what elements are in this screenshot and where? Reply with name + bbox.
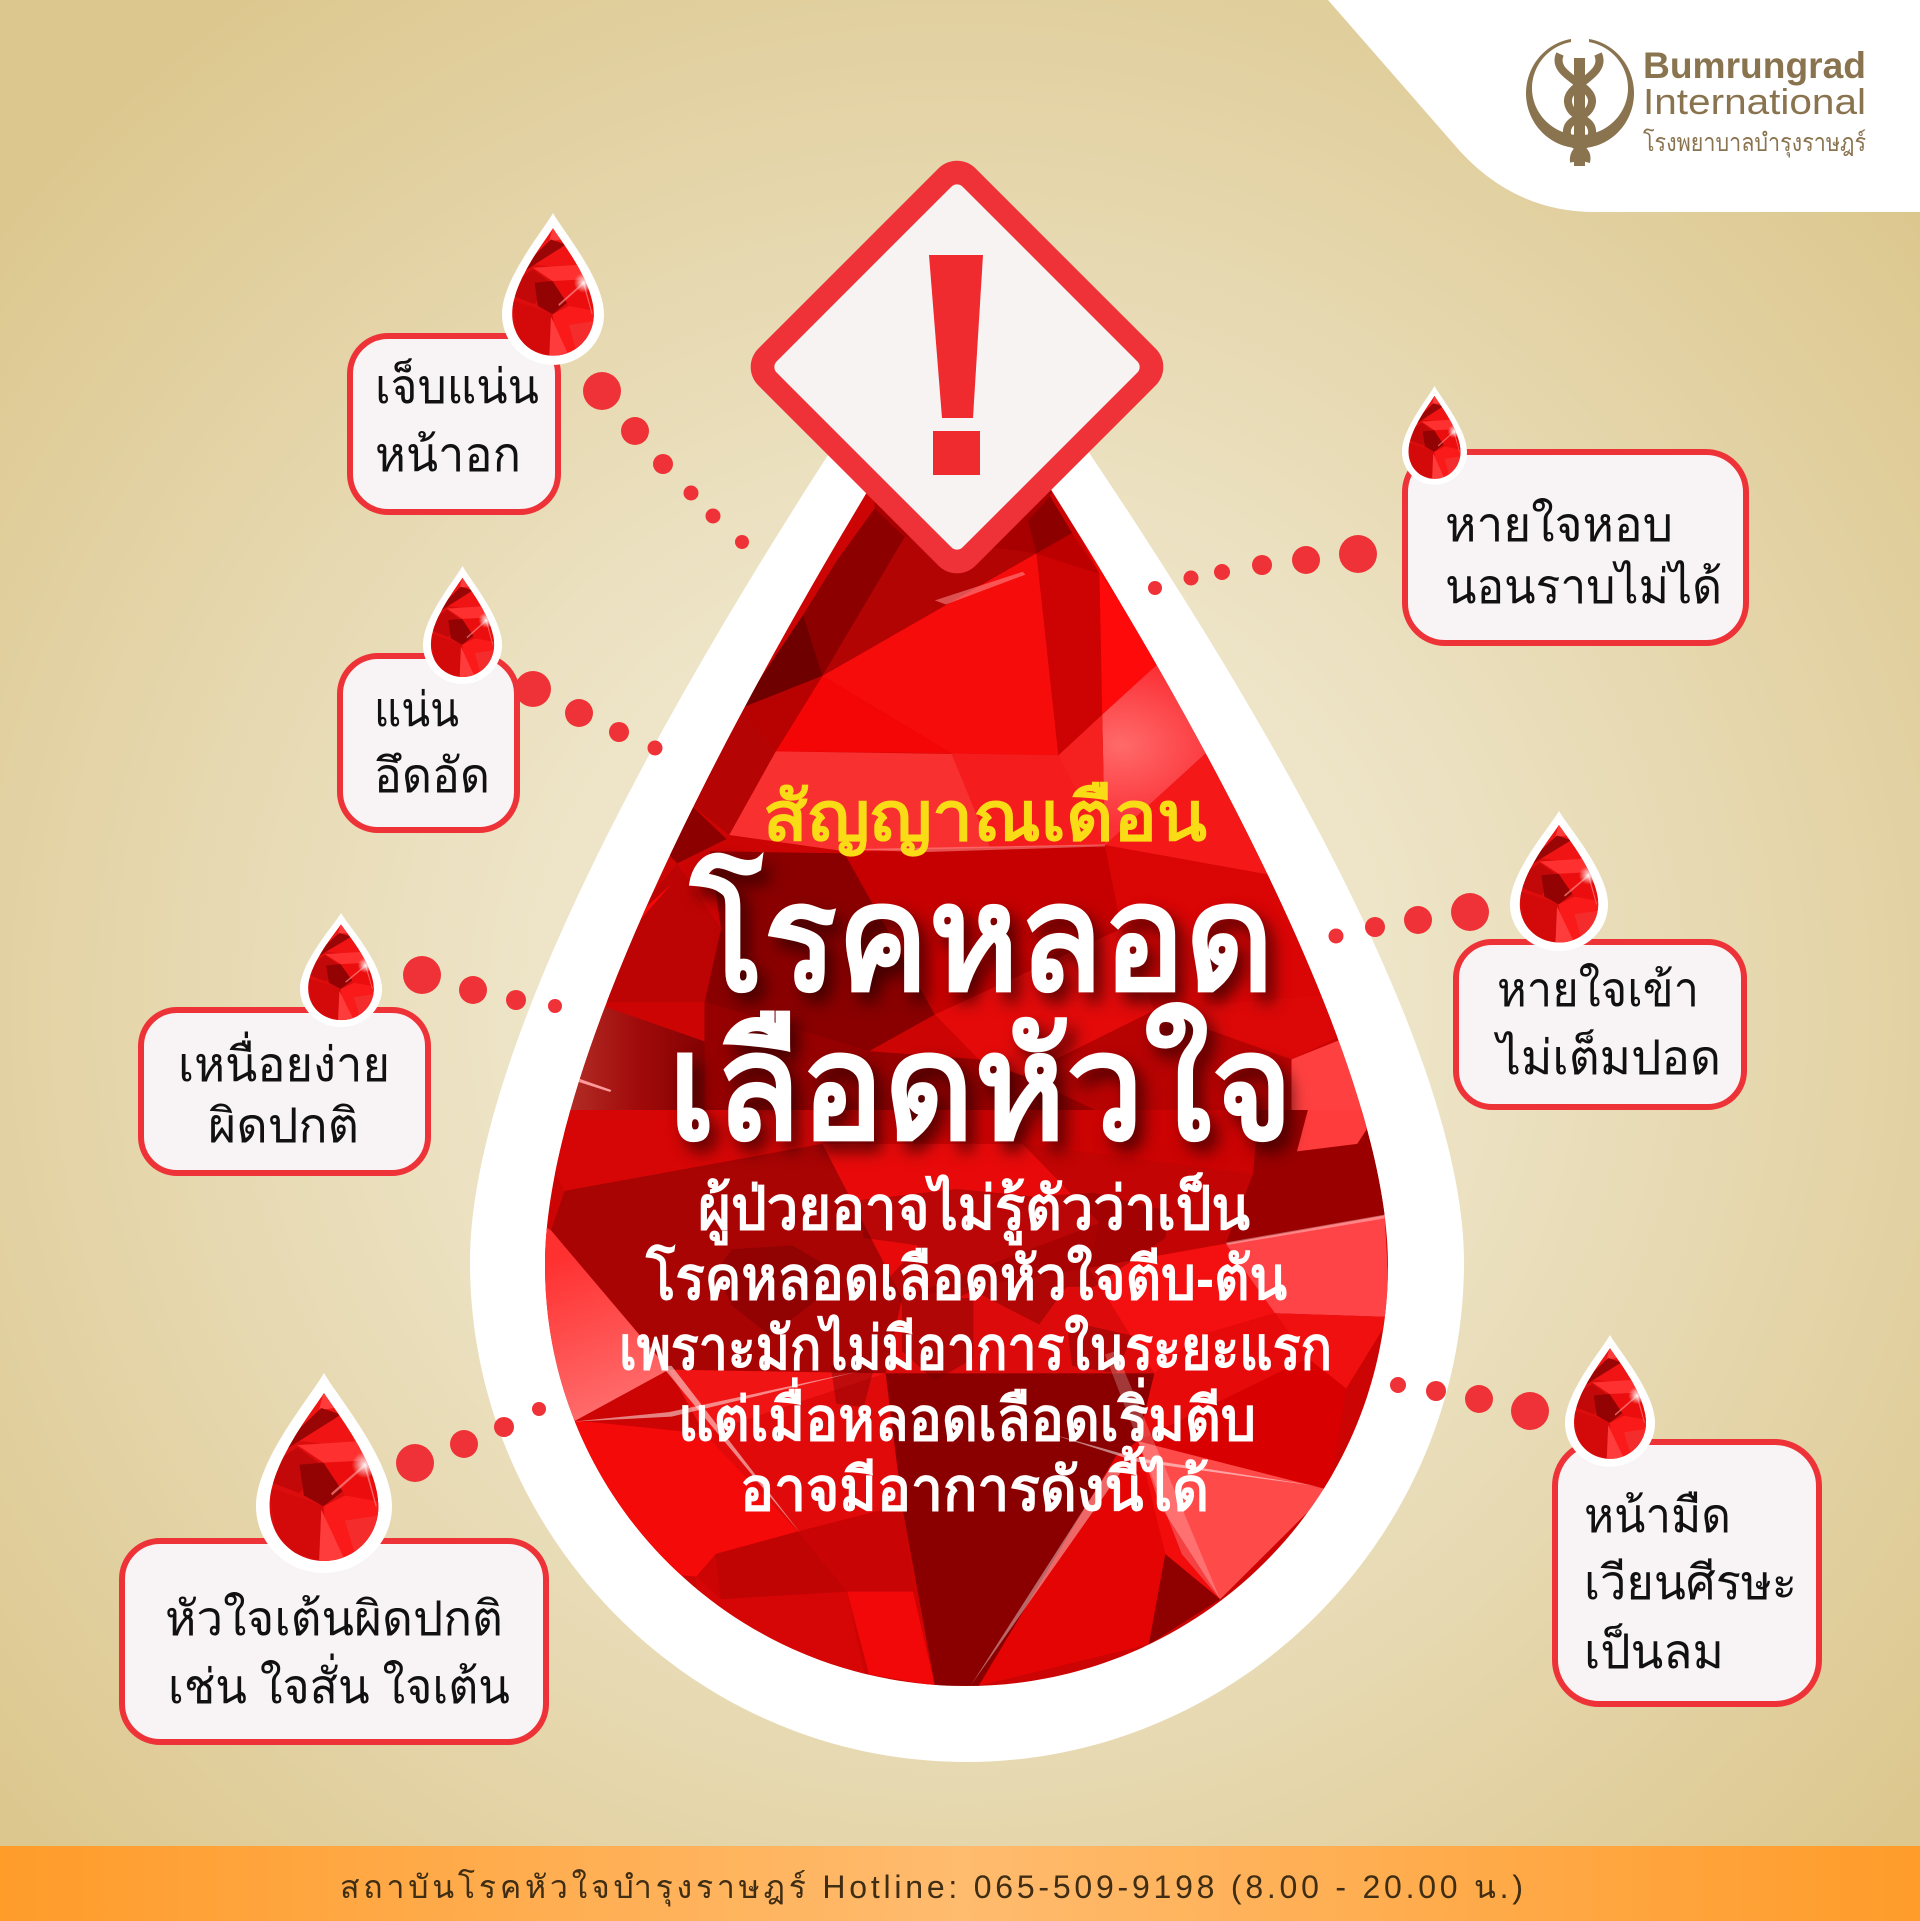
icon: ruby drop <box>502 213 604 365</box>
icon: ruby drop <box>300 913 382 1027</box>
white logo corner panel <box>1328 0 1920 212</box>
body text: โรคหลอดเลือดหัวใจตีบ-ตัน <box>645 1243 1287 1312</box>
dotted connector: fatigue <box>403 956 562 1013</box>
body text: เพราะมักไม่มีอาการในระยะแรก <box>619 1313 1332 1382</box>
light rays <box>573 1215 1385 1686</box>
chest pain text: หน้าอก <box>375 429 521 482</box>
shortness of breath text: นอนราบไม่ได้ <box>1445 559 1722 614</box>
dotted connector: dizziness <box>1390 1377 1549 1430</box>
icon: ruby drop <box>256 1373 392 1573</box>
logo thai name: โรงพยาบาลบำรุงราษฎร์ <box>1643 128 1866 158</box>
icon: ruby drop <box>423 566 502 684</box>
world map silhouette <box>716 1189 1171 1407</box>
dotted connector: breathing in <box>1328 893 1489 944</box>
body text <box>619 1172 1332 1523</box>
callout: arrhythmia <box>122 1373 546 1742</box>
arrhythmia text: หัวใจเต้นผิดปกติ <box>165 1591 503 1646</box>
breathing text: ไม่เต็มปอด <box>1493 1029 1721 1085</box>
diamond frame <box>740 150 1174 584</box>
breathing text <box>1493 962 1721 1085</box>
callout: unusual fatigue <box>141 913 428 1173</box>
logo emblem: caduceus <box>1526 39 1634 166</box>
chest pain text: เจ็บแน่น <box>375 358 539 414</box>
dotted connector: chest pain <box>583 372 749 549</box>
fatigue text: เหนื่อยง่าย <box>178 1031 390 1092</box>
warning diamond with exclamation mark <box>740 150 1174 584</box>
title: coronary artery disease: โรคหลอด <box>688 851 1274 1022</box>
body text: ผู้ป่วยอาจไม่รู้ตัวว่าเป็น <box>698 1172 1250 1246</box>
tightness text <box>374 684 490 803</box>
arrhythmia text <box>165 1591 510 1714</box>
icon: ruby drop <box>1402 386 1467 485</box>
exclamation bar <box>929 255 983 418</box>
tightness text: อึดอัด <box>374 750 490 803</box>
tightness text: แน่น <box>374 684 459 737</box>
icon: ruby drop <box>1510 811 1608 951</box>
fatigue text <box>178 1031 390 1153</box>
logo wordmark: Bumrungrad <box>1643 45 1866 86</box>
ruby blood drop with faceted texture <box>545 490 1388 1686</box>
breathing text: หายใจเข้า <box>1497 962 1699 1017</box>
white outer blood drop <box>470 260 1464 1762</box>
chest pain text <box>375 358 539 482</box>
arrhythmia text: เช่น ใจสั่น ใจเต้น <box>168 1653 510 1714</box>
diamond face <box>771 181 1143 553</box>
shortness of breath text: หายใจหอบ <box>1445 497 1673 552</box>
shortness of breath text <box>1445 497 1722 614</box>
dizziness text: เป็นลม <box>1584 1623 1724 1679</box>
dotted connector: arrhythmia <box>396 1402 546 1482</box>
logo subtitle: International <box>1643 81 1866 122</box>
footer hotline bar <box>0 1846 1920 1921</box>
exclamation dot <box>933 431 980 475</box>
title: coronary artery disease: เลือดหัวใจ <box>668 1002 1293 1171</box>
dizziness text: หน้ามืด <box>1584 1490 1731 1543</box>
title: coronary artery disease <box>668 851 1293 1171</box>
fatigue text: ผิดปกติ <box>208 1100 359 1153</box>
callout: shortness of breath <box>1402 386 1746 643</box>
dizziness text: เวียนศีรษะ <box>1584 1557 1797 1610</box>
logo: Bumrungrad International <box>1526 39 1866 166</box>
body text: อาจมีอาการดังนี้ได้ <box>740 1445 1209 1523</box>
hotline text: สถาบันโรคหัวใจบำรุงราษฎร์ Hotline: 065-509-9198 (8.00 - 20.00 น.) <box>340 1869 1523 1907</box>
dotted connector: tightness <box>515 671 662 756</box>
body text: แต่เมื่อหลอดเลือดเริ่มตีบ <box>678 1377 1256 1453</box>
callout: chest pain <box>350 213 604 512</box>
callout: cannot breathe in fully <box>1456 811 1744 1107</box>
icon: ruby drop <box>1565 1335 1655 1467</box>
dotted connector: shortness of breath <box>1148 535 1377 595</box>
heading: warning signs: สัญญาณเตือน <box>763 779 1207 857</box>
callout: dizziness <box>1555 1335 1819 1704</box>
callout: tightness <box>340 566 517 830</box>
dizziness text <box>1584 1490 1797 1679</box>
